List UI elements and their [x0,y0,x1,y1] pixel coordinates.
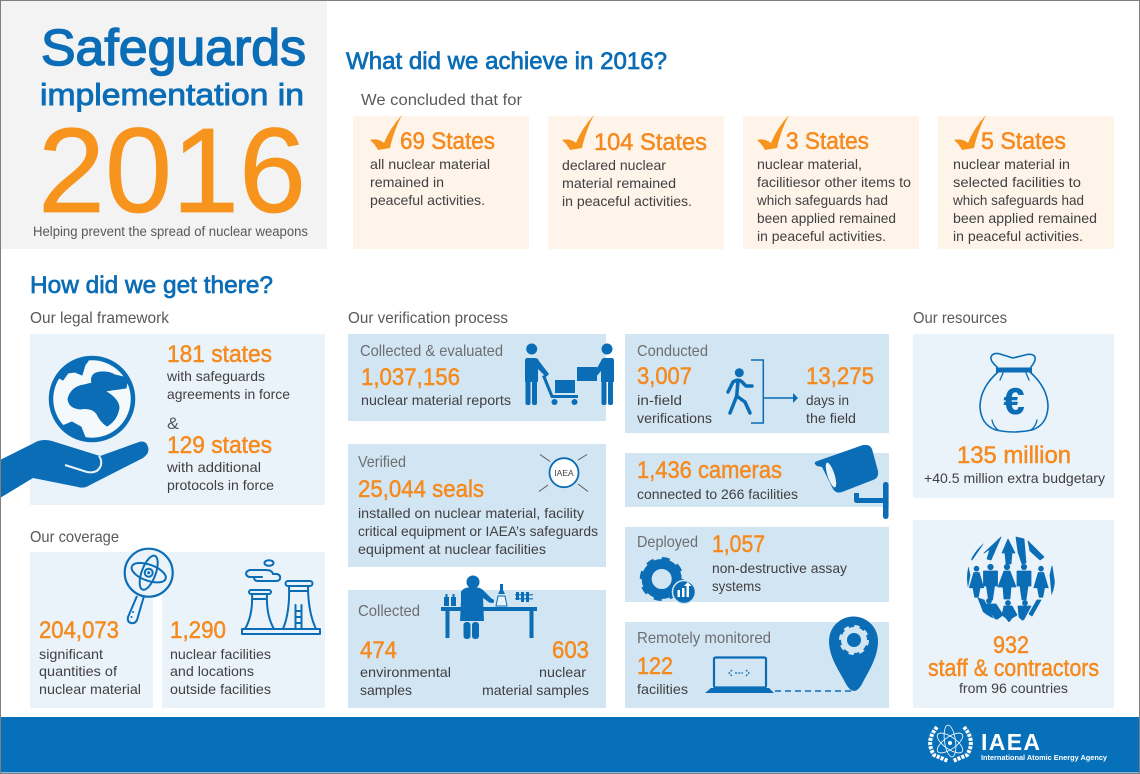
heading: achievements: What did we achieve in 2016? [346,48,667,75]
title panel [1,1,327,249]
description: been applied remained [953,210,1097,226]
description: nuclear material reports [361,392,511,408]
description: which safeguards had [756,192,888,208]
text: we concluded: We concluded that for [361,92,523,109]
icon: check mark [562,115,594,150]
stat: in-field verifications: 3,007 [637,363,692,390]
number: 204,073 [39,617,119,644]
description [39,646,141,697]
description [952,156,1097,244]
panel: remotely monitored [625,616,889,708]
description: nuclear facilities [170,646,271,662]
icon: globe of people [964,537,1055,622]
icon: check mark [954,115,986,150]
description: connected to 266 facilities [637,486,798,502]
logo: IAEA emblem [930,724,971,761]
stat: 129 states: 129 states [167,432,272,459]
panel: collected and evaluated [348,334,614,421]
description: in peaceful activities. [757,228,886,244]
description [562,157,692,209]
panel: 69 States [353,115,529,249]
description: remained in [370,174,444,190]
icon: magnifier with atom [125,549,173,623]
subtitle: Helping prevent the spread of nuclear weapons [33,224,308,239]
description: peaceful activities. [370,192,485,208]
description: all nuclear material [370,156,490,172]
icon: money bag [980,353,1048,432]
stat: environmental samples: samples [360,682,412,698]
icon: people with cart [525,344,614,405]
panel: cameras [625,445,889,519]
stat: nuclear material samples: nuclear [539,664,586,680]
description: in peaceful activities. [562,193,692,209]
description: in peaceful activities. [953,228,1083,244]
title: Safeguards: Safeguards [41,19,306,76]
number: 104 States [594,129,707,156]
label: Collected & evaluated [360,343,503,360]
logo: IAEA wordmark: IAEA [981,729,1040,755]
icon: walking person [728,368,752,413]
stat: 129 states: protocols in force [167,477,274,493]
description: facilitiesor other items to [757,174,911,190]
description: non-destructive assay [712,560,847,576]
arrow: bracket to days [751,360,798,423]
stat: days in the field: the field [806,410,856,426]
number: 69 States [400,128,495,155]
stat: in-field verifications [637,363,712,426]
description: material remained [562,175,676,191]
description [358,505,598,557]
stat: 129 states [166,432,274,493]
number: 1,290 [170,617,226,644]
description [712,560,847,594]
description: declared nuclear [562,157,666,173]
heading: how did we get there: How did we get there? [30,272,273,299]
description: selected facilities to [953,174,1081,190]
description: systems [712,578,761,594]
description: which safeguards had [952,192,1084,208]
title: 2016: 2016 [38,102,306,238]
heading: resources: Our resources [913,310,1007,327]
number: 3 States [786,128,869,155]
stat: in-field verifications: in-field [637,392,682,408]
icon: location pin with gear [829,616,878,691]
description: been applied remained [757,210,896,226]
description: outside facilities [170,681,271,697]
description: quantities of [39,663,117,679]
panel: deployed systems [625,527,889,604]
description: and locations [170,663,254,679]
stat: nuclear material samples [482,637,589,698]
icon: globe [48,352,133,448]
heading: coverage: Our coverage [30,529,119,546]
number: 25,044 seals [358,476,484,503]
footer bar [1,717,1139,772]
stat: in-field verifications: verifications [637,410,712,426]
icon: check mark [757,115,789,150]
number: 135 million [957,442,1071,469]
label: Conducted [637,343,708,360]
icon: camera [815,445,888,519]
number: 932 [993,632,1029,659]
description [170,646,271,697]
number: 1,436 cameras [637,457,782,484]
panel: 3 States [743,115,919,249]
number: 1,057 [712,531,765,558]
number: 5 States [981,128,1066,155]
stat: days in the field: 13,275 [806,363,874,390]
ampersand: & [167,414,180,433]
panel: 104 States [548,115,724,249]
label: Remotely monitored [637,630,771,647]
panel: budget [913,334,1114,498]
label: Deployed [637,534,698,551]
icon: IAEA seal: IAEA [554,468,574,478]
description: +40.5 million extra budgetary [924,470,1105,486]
stat: 181 states: with safeguards [166,368,265,384]
description: installed on nuclear material, facility [358,505,584,521]
number: 1,037,156 [361,364,460,391]
panel: legal framework [0,334,325,505]
number: 122 [637,653,673,680]
description [370,156,490,208]
icon: check mark [370,115,402,150]
description: facilities [637,681,688,697]
panel: staff [913,520,1114,708]
description: nuclear material, [757,156,862,172]
stat: 181 states [166,341,290,402]
panel: conducted verifications [625,334,889,433]
stat: environmental samples: environmental [360,664,451,680]
icon: lab technician at table [441,576,537,639]
icon: gear with chart [642,559,696,604]
description: significant [39,646,103,662]
stat: days in the field [806,363,874,426]
title: implementation in: implementation in [40,77,304,112]
description: nuclear material in [953,156,1070,172]
label: Collected [358,603,420,620]
description: from 96 countries [959,680,1068,696]
description [756,156,911,244]
icon: laptop [705,658,774,693]
icon: power plant [242,560,320,634]
description: nuclear material [39,681,141,697]
caption: staff & contractors [928,655,1099,682]
label: Verified [358,454,406,471]
icon: IAEA seal [539,454,588,492]
heading: verification process: Our verification process [348,310,508,327]
stat: nuclear material samples: 603 [552,637,589,664]
stat: nuclear material samples: material samples [482,682,589,698]
stat: days in the field: days in [806,392,849,408]
stat: 129 states: with additional [166,459,261,475]
panel: collected samples [348,576,606,708]
stat: environmental samples: 474 [360,637,397,664]
icon: money bag: € [1004,381,1024,422]
panel: verified seals [348,444,606,567]
logo: agency name: International Atomic Energy Agency [981,753,1108,762]
heading: legal framework: Our legal framework [30,310,170,327]
panel: significant quantities [30,552,153,708]
stat: environmental samples [360,637,451,698]
panel: 5 States [938,115,1114,249]
stat: 181 states: agreements in force [167,386,290,402]
dashed connector [775,690,853,692]
panel: nuclear facilities [162,552,325,708]
stat: 181 states: 181 states [167,341,272,368]
description: critical equipment or IAEA’s safeguards [358,523,598,539]
description: equipment at nuclear facilities [358,541,546,557]
icon: hand [0,440,148,498]
